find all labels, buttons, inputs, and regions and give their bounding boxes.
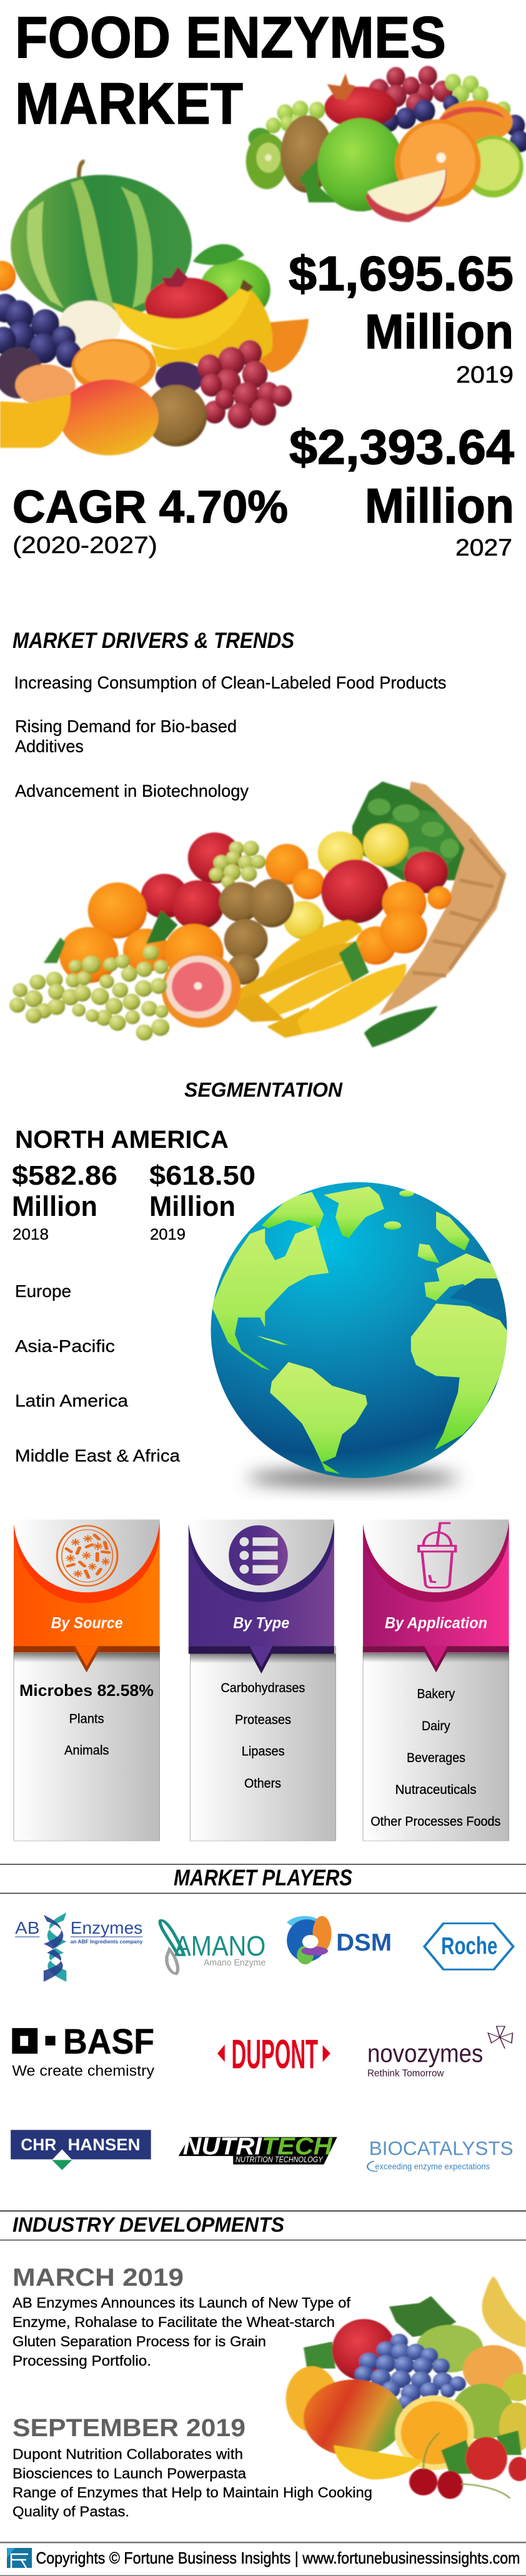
panel text: by source: By Source — [51, 1614, 123, 1632]
logo: Amano — [160, 1921, 265, 1974]
region: North America stats: NORTH AMERICA — [15, 1126, 229, 1153]
title: MARKET — [15, 71, 243, 136]
region: North America stats: $582.86 — [12, 1160, 117, 1191]
icon: Fortune Business Insights logo — [7, 2548, 32, 2568]
logo: DSM: DSM — [336, 1929, 392, 1956]
logo: AB Enzymes: AB — [15, 1917, 39, 1937]
panel text: by source: Plants — [69, 1712, 104, 1726]
stat: 2019 market size: Million — [365, 304, 514, 359]
logo: BASF: We create chemistry — [12, 2062, 154, 2079]
development: September 2019: SEPTEMBER 2019 — [12, 2414, 246, 2442]
region: North America stats: 2018 — [12, 1226, 49, 1243]
list: other regions — [15, 1281, 180, 1466]
panel text: by type: Carbohydrases — [221, 1681, 305, 1695]
stat: CAGR — [12, 482, 288, 559]
logo: Nutritech: NUTRI — [183, 2132, 262, 2160]
stat: CAGR: (2020-2027) — [12, 532, 157, 559]
stat: 2027 market size — [289, 419, 514, 561]
logo: BASF — [12, 2022, 154, 2079]
logo: Nutritech — [179, 2132, 337, 2165]
logo: BASF: BASF — [63, 2022, 154, 2061]
logo: DSM — [287, 1916, 392, 1964]
region: North America stats — [12, 1126, 256, 1243]
list: other regions: Asia-Pacific — [15, 1336, 115, 1356]
list: market drivers: Rising Demand for Bio-based — [15, 717, 237, 736]
logo: Nutritech: NUTRITION TECHNOLOGY — [236, 2155, 323, 2164]
panel text: by application: Beverages — [407, 1751, 465, 1765]
list: market drivers: Increasing Consumption of Clean-Labeled Food Products — [14, 673, 446, 692]
stat: 2027 market size: 2027 — [455, 535, 512, 561]
logo: Amano: Amano Enzyme — [204, 1958, 265, 1968]
stat: 2027 market size: $2,393.64 — [289, 419, 514, 474]
stat: CAGR: CAGR 4.70% — [12, 482, 288, 532]
logo: DuPont — [217, 2031, 330, 2077]
region: North America stats: Million — [12, 1190, 97, 1222]
panel: by application — [363, 1519, 509, 1841]
panel: by type — [189, 1519, 336, 1841]
panel text: by type: Proteases — [235, 1713, 291, 1727]
illustration: fruit pile bottom right — [286, 2276, 526, 2499]
region: North America stats: 2019 — [150, 1226, 186, 1243]
panel text: by type — [221, 1614, 305, 1791]
icon: petri dish with microbes — [57, 1526, 117, 1586]
panel text: by application: Dairy — [422, 1719, 450, 1733]
logo: AB Enzymes — [15, 1912, 143, 1982]
heading: industry developments: INDUSTRY DEVELOPMENTS — [12, 2213, 284, 2236]
logo: Amano: AMANO — [174, 1930, 265, 1962]
panel text: by type: Lipases — [242, 1744, 285, 1759]
panel text: by type: Others — [244, 1776, 281, 1791]
heading: market players: MARKET PLAYERS — [174, 1865, 352, 1891]
development: September 2019: Quality of Pastas. — [12, 2503, 129, 2519]
development: March 2019: AB Enzymes Announces its Launch of New Type of — [12, 2294, 351, 2311]
illustration: globe — [208, 1178, 514, 1486]
list: other regions: Latin America — [15, 1391, 128, 1411]
title — [15, 4, 446, 136]
logo: Biocatalysts — [367, 2137, 514, 2172]
panel text: by source: Animals — [64, 1743, 109, 1758]
logos: market players: DUPONT — [232, 2031, 318, 2077]
development: March 2019: MARCH 2019 — [12, 2264, 184, 2291]
icon: drink cup — [419, 1523, 455, 1588]
panel text: by source: Microbes 82.58% — [19, 1681, 154, 1700]
heading: segmentation: SEGMENTATION — [184, 1079, 343, 1101]
panel text: by application: Other Processes Foods — [370, 1814, 500, 1829]
logo: Novozymes: Rethink Tomorrow — [367, 2068, 444, 2079]
development: March 2019: Enzyme, Rohalase to Facilitate the Wheat-starch — [12, 2314, 335, 2330]
illustration: fruit pile top right — [246, 66, 526, 222]
development: March 2019: Gluten Separation Process for is Grain — [12, 2333, 266, 2349]
logo: Nutritech: TECH — [262, 2132, 333, 2160]
stat: 2019 market size: 2019 — [456, 362, 514, 388]
logo: Chr Hansen: CHR — [21, 2136, 56, 2154]
title: FOOD ENZYMES — [15, 4, 446, 70]
logo: AB Enzymes: Enzymes — [71, 1917, 142, 1937]
logo: Novozymes — [367, 2026, 513, 2079]
list: market drivers: Advancement in Biotechnology — [15, 781, 249, 800]
development: March 2019 — [12, 2264, 351, 2369]
list: other regions: Europe — [15, 1281, 71, 1301]
logo: Chr Hansen — [11, 2130, 151, 2170]
panel text: by application: By Application — [385, 1614, 487, 1632]
illustration: fruit pile with watermelon — [0, 162, 309, 456]
icon: list — [229, 1526, 288, 1585]
panel text: by application: Bakery — [417, 1687, 455, 1702]
list: other regions: Middle East & Africa — [15, 1446, 180, 1466]
panel text: by type: By Type — [233, 1614, 289, 1632]
stat: 2019 market size — [289, 246, 514, 388]
logo: AB Enzymes: an ABF Ingredients company — [71, 1939, 143, 1945]
panel text: by source — [19, 1614, 154, 1758]
stat: 2019 market size: $1,695.65 — [289, 246, 514, 301]
region: North America stats: $618.50 — [149, 1160, 256, 1191]
panel: by source — [14, 1519, 160, 1841]
panel text: by application — [370, 1614, 500, 1829]
heading: market drivers: MARKET DRIVERS & TRENDS — [12, 629, 294, 653]
logo: Chr Hansen: HANSEN — [67, 2136, 140, 2154]
development: September 2019: Dupont Nutrition Collaborates with — [12, 2446, 243, 2462]
development: September 2019: Range of Enzymes that Help to Maintain High Cooking — [12, 2484, 372, 2500]
logo: Roche — [424, 1923, 514, 1969]
list: market drivers: Additives — [15, 737, 84, 756]
illustration: fruit basket — [9, 781, 507, 1047]
development: March 2019: Processing Portfolio. — [12, 2353, 151, 2369]
list: market drivers — [14, 673, 446, 800]
development: September 2019: Biosciences to Launch Powerpasta — [12, 2466, 246, 2482]
stat: 2027 market size: Million — [365, 478, 514, 533]
panel text: by application: Nutraceuticals — [395, 1783, 477, 1797]
development: September 2019 — [12, 2414, 372, 2519]
region: North America stats: Million — [149, 1190, 236, 1222]
logos: market players — [11, 1912, 514, 2172]
